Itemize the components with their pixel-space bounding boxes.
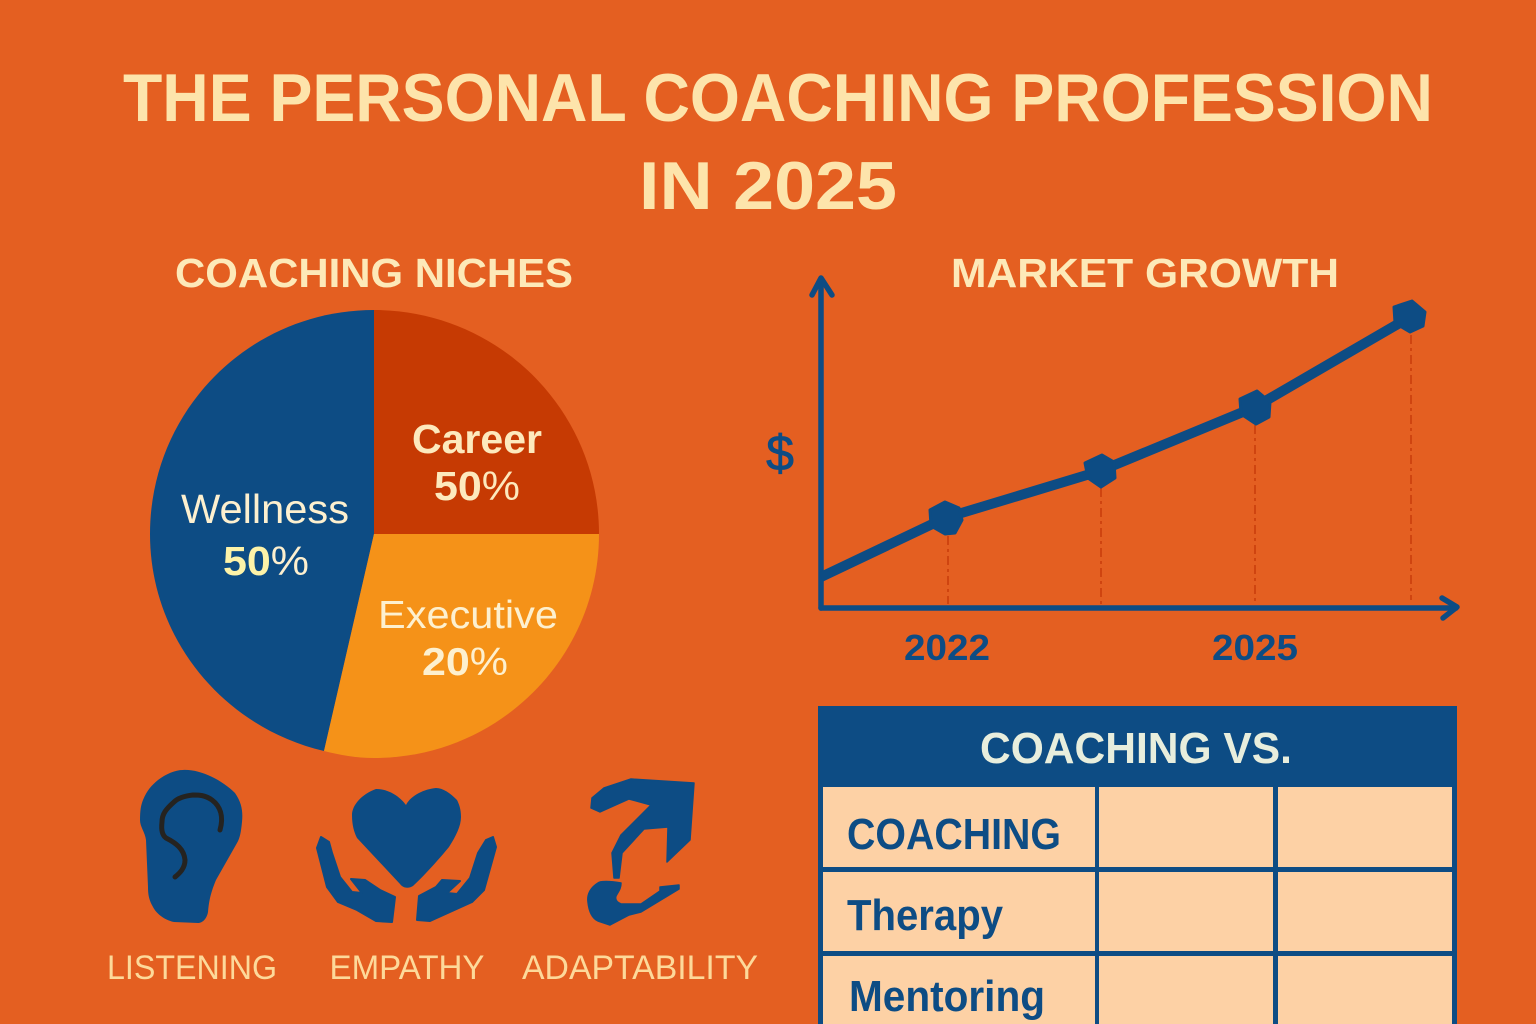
label: wellness: Wellness [181, 486, 349, 532]
row label: therapy: Therapy [847, 891, 1003, 940]
label: executive [378, 594, 558, 684]
label: empathy: EMPATHY [330, 949, 484, 987]
row label: coaching: COACHING [847, 810, 1061, 859]
line chart: market growth [766, 278, 1457, 668]
growth line [821, 317, 1410, 577]
x label: 2025: 2025 [1212, 627, 1298, 668]
heading: coaching niches: COACHING NICHES [175, 250, 573, 296]
heading: market growth: MARKET GROWTH [951, 250, 1339, 296]
label: career: 50% [434, 463, 520, 509]
title: IN 2025 [639, 148, 897, 224]
table frame [818, 706, 1457, 1024]
label: wellness: 50% [223, 538, 309, 584]
data points [930, 301, 1425, 534]
label: listening: LISTENING [107, 949, 277, 987]
table heading: COACHING VS. [980, 724, 1292, 773]
label: adaptability: ADAPTABILITY [522, 949, 758, 987]
table cells [823, 787, 1452, 1024]
pie chart: coaching niches [150, 310, 599, 758]
label: career [412, 416, 542, 509]
axis label: dollar: $ [766, 425, 794, 481]
icon: heart in hands [317, 788, 496, 922]
row label: mentoring: Mentoring [849, 972, 1045, 1021]
icon: ear [140, 770, 242, 923]
icon: adaptability arrows [588, 779, 694, 925]
slice: wellness [150, 310, 374, 751]
comparison table [818, 706, 1457, 1024]
slice: executive [324, 534, 599, 758]
label: career: Career [412, 416, 542, 462]
title [123, 60, 1433, 224]
drop lines [948, 335, 1411, 604]
axes [812, 278, 1457, 618]
slice: career [374, 310, 599, 534]
x label: 2022: 2022 [904, 627, 990, 668]
label: executive: 20% [422, 641, 508, 684]
label: wellness [181, 486, 349, 584]
label: executive: Executive [378, 594, 558, 637]
title: THE PERSONAL COACHING PROFESSION [123, 60, 1433, 136]
